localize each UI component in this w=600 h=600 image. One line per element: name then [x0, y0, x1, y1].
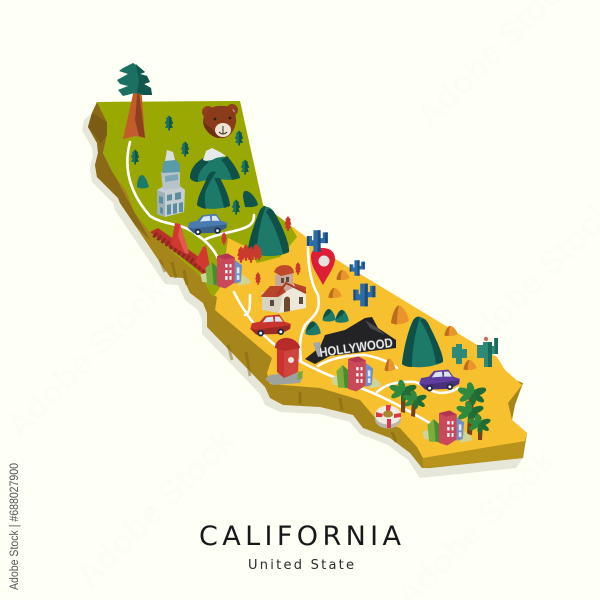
icon: palm trees south	[455, 381, 491, 440]
hollywood sign	[305, 317, 396, 364]
icon: small teal bushes	[305, 309, 349, 335]
icon: red car	[250, 314, 291, 336]
icon: desert rocks	[328, 270, 477, 371]
watermark: Adobe Stock	[69, 422, 243, 596]
icon: bear head	[202, 104, 238, 138]
icon: red trees	[221, 216, 301, 285]
icon: blue car	[188, 214, 227, 235]
side wall	[88, 102, 527, 468]
hollywood text: HOLLYWOOD	[318, 335, 394, 360]
title: CALIFORNIA	[199, 521, 402, 552]
subtitle: United State	[248, 558, 354, 573]
icon: city south	[422, 411, 473, 446]
icon: lifebuoy	[375, 405, 401, 428]
watermark: Adobe Stock	[0, 272, 173, 446]
green surface	[97, 101, 297, 297]
icon: blue cacti	[307, 230, 375, 306]
icon: golden gate bridge	[150, 223, 213, 278]
adobe stock id: Adobe Stock | #688027900	[9, 463, 21, 590]
icon: city mid	[332, 357, 382, 392]
icon: purple car	[419, 369, 460, 391]
yellow surface	[97, 101, 527, 458]
icon: sequoia tree	[117, 63, 152, 139]
icon: palm trees centre	[388, 379, 427, 417]
icon: city left	[200, 254, 251, 288]
icon: bushes north	[137, 175, 258, 207]
map base	[88, 101, 527, 468]
icon: location pin	[311, 248, 335, 285]
icon: north mountain	[248, 206, 289, 256]
icon: small green trees north	[131, 115, 249, 215]
icon: large desert mountain	[402, 317, 443, 367]
map shadow	[82, 113, 523, 478]
icon: green cacti	[452, 337, 498, 367]
icon: snowy mountains	[190, 148, 240, 209]
icon: red tower	[265, 338, 303, 385]
icon: church	[261, 265, 306, 313]
icon: capitol building	[157, 150, 185, 217]
roads	[127, 142, 458, 423]
